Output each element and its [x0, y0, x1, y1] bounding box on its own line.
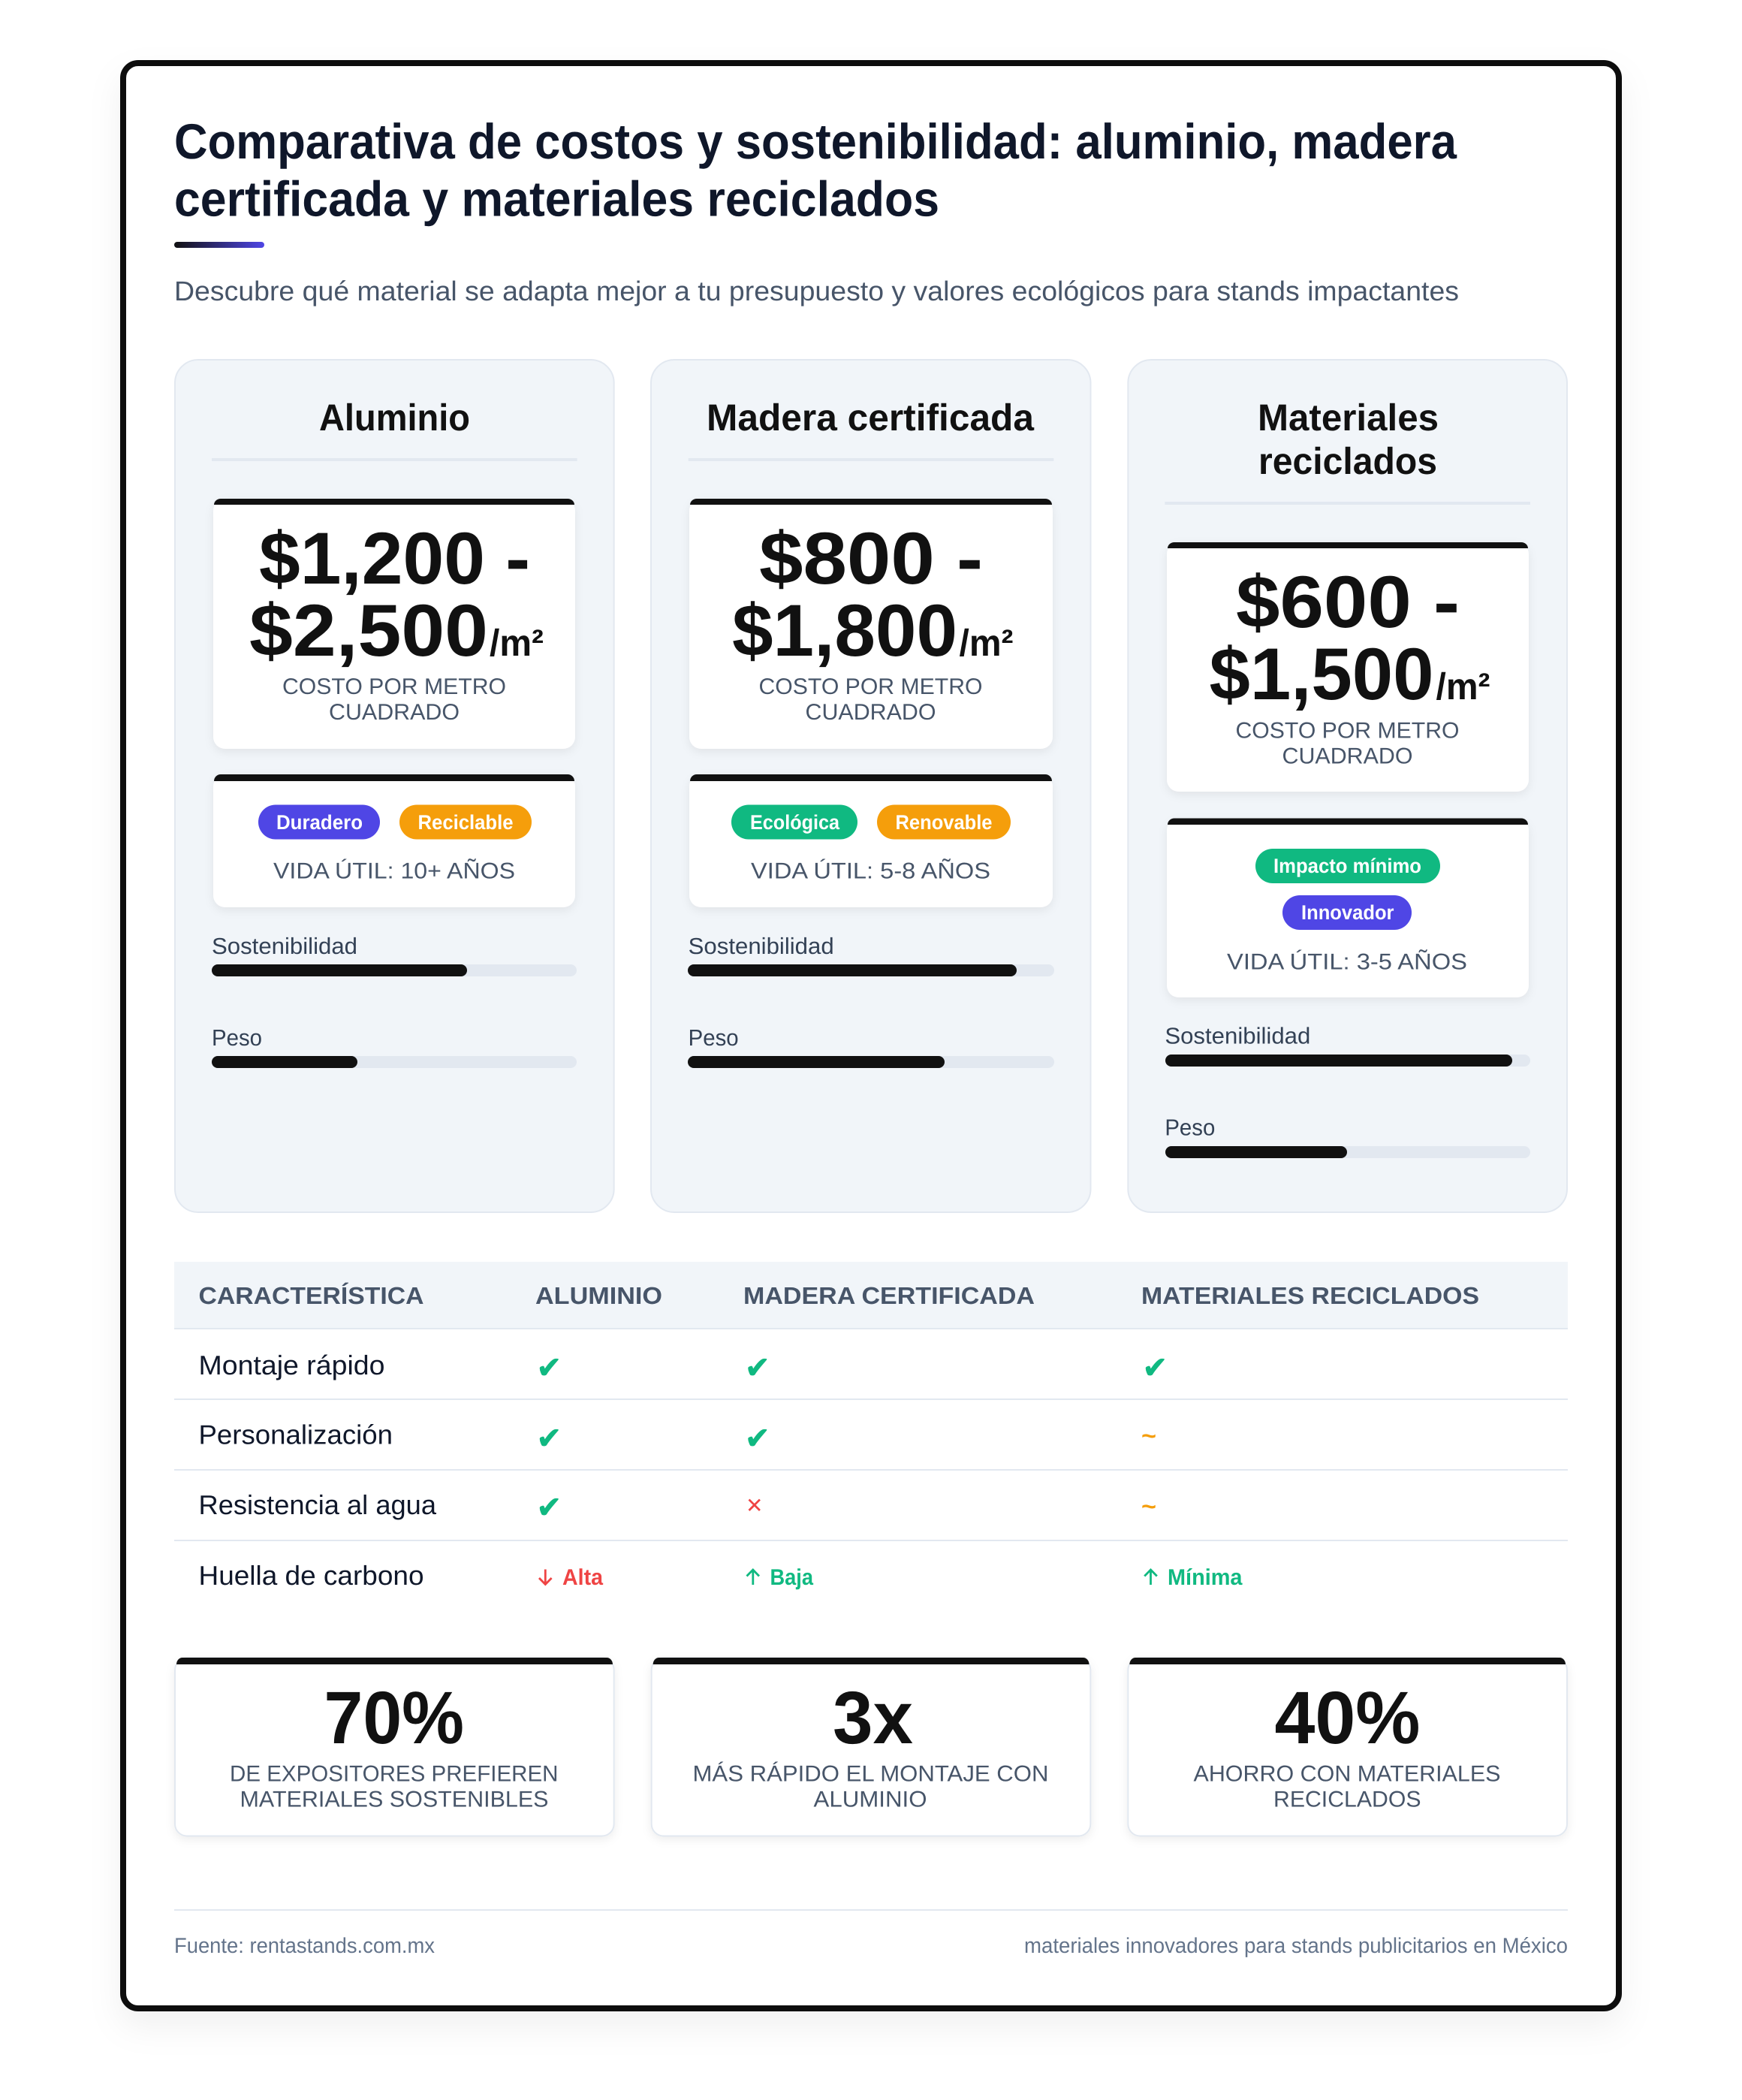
- meter: sostenibilidad aluminio: [212, 934, 577, 976]
- badge: renovable: [877, 805, 1011, 840]
- meter: sostenibilidad aluminio: Sostenibilidad: [212, 934, 357, 959]
- price card: aluminio: $2,500: [249, 589, 488, 671]
- price card: madera: $800 -: [759, 517, 983, 599]
- price card: reciclados: CUADRADO: [1282, 744, 1413, 769]
- arrow up: [746, 1570, 759, 1585]
- stat card: 3x: MÁS RÁPIDO EL MONTAJE CON: [692, 1761, 1048, 1786]
- features card: aluminio: [213, 774, 575, 907]
- price card: madera: [689, 499, 1053, 749]
- stat card: 3x: [652, 1658, 1090, 1836]
- arrow up: [1144, 1570, 1157, 1585]
- badge: innovador: Innovador: [1301, 901, 1394, 924]
- panel: materiales reciclados: [1128, 360, 1567, 1212]
- price card: reciclados: /m²: [1436, 665, 1490, 708]
- meter: sostenibilidad madera: [688, 934, 1054, 976]
- price card: madera: COSTO POR METRO: [758, 674, 982, 699]
- badge: impacto minimo: Impacto mínimo: [1273, 855, 1421, 877]
- badge: renovable: Renovable: [895, 811, 993, 834]
- footer: [174, 1909, 1568, 1958]
- price card: reciclados: COSTO POR METRO: [1236, 718, 1460, 744]
- row: montaje rapido: Montaje rápido: [198, 1350, 384, 1380]
- heading: aluminio: Aluminio: [319, 397, 470, 439]
- row: personalizacion: ✔: [745, 1421, 770, 1456]
- row: montaje rapido: [198, 1350, 1168, 1385]
- table header: MADERA CERTIFICADA: [743, 1282, 1035, 1309]
- stat card: 40%: 40%: [1275, 1676, 1421, 1759]
- meter: peso reciclados: Peso: [1165, 1115, 1215, 1140]
- table header: CARACTERÍSTICA: [198, 1282, 423, 1309]
- stat card: 40%: AHORRO CON MATERIALES: [1194, 1762, 1500, 1786]
- table header: [174, 1262, 1568, 1329]
- row: montaje rapido: ✔: [745, 1350, 770, 1385]
- badge: duradero: Duradero: [276, 811, 363, 834]
- features card: madera: VIDA ÚTIL: 5-8 AÑOS: [751, 858, 990, 883]
- badge: ecologica: [731, 805, 857, 840]
- stat card: 70%: MATERIALES SOSTENIBLES: [240, 1788, 548, 1812]
- badge: duradero: [258, 805, 380, 840]
- meter: peso madera: [688, 1025, 1054, 1068]
- stat card: 40%: [1128, 1658, 1567, 1836]
- stat card: 70%: DE EXPOSITORES PREFIEREN: [230, 1762, 559, 1786]
- price card: madera: /m²: [960, 622, 1014, 664]
- meter: peso reciclados: [1165, 1115, 1530, 1158]
- badge: innovador: [1282, 895, 1412, 930]
- meter: peso aluminio: [212, 1025, 577, 1068]
- price card: reciclados: $1,500: [1209, 632, 1434, 715]
- arrow down: [539, 1570, 552, 1585]
- row: resistencia al agua: ✕: [746, 1493, 763, 1518]
- badge: ecologica: Ecológica: [750, 811, 840, 834]
- meter: sostenibilidad reciclados: Sostenibilidad: [1165, 1023, 1310, 1048]
- stat card: 3x: ALUMINIO: [814, 1788, 927, 1812]
- row: huella de carbono: Mínima: [1168, 1565, 1243, 1590]
- row: resistencia al agua: ~: [1141, 1493, 1156, 1520]
- heading: materiales reciclados: [1258, 397, 1439, 482]
- main frame: [123, 63, 1619, 2008]
- features card: reciclados: [1167, 819, 1529, 997]
- features card: reciclados: VIDA ÚTIL: 3-5 AÑOS: [1227, 949, 1467, 975]
- heading: madera certificada: Madera certificada: [707, 397, 1035, 439]
- row: montaje rapido: ✔: [1143, 1350, 1168, 1385]
- row: montaje rapido: ✔: [536, 1350, 562, 1385]
- price card: aluminio: CUADRADO: [329, 700, 460, 725]
- source note: Fuente: rentastands.com.mx: [174, 1934, 435, 1958]
- row: huella de carbono: [198, 1560, 1243, 1591]
- price card: aluminio: /m²: [490, 622, 544, 664]
- price card: reciclados: [1167, 542, 1529, 792]
- features card: aluminio: VIDA ÚTIL: 10+ AÑOS: [273, 858, 515, 883]
- comparison table: [174, 1262, 1568, 1591]
- price card: aluminio: COSTO POR METRO: [282, 674, 506, 699]
- title underline accent: [174, 242, 264, 248]
- row: personalizacion: [198, 1420, 1156, 1456]
- price card: reciclados: $600 -: [1236, 560, 1460, 643]
- row: huella de carbono: Alta: [562, 1565, 603, 1590]
- panel: aluminio: [175, 360, 614, 1212]
- footer keyword: materiales innovadores para stands publicitarios en México: [1024, 1934, 1568, 1958]
- table header: ALUMINIO: [535, 1282, 662, 1309]
- badge: reciclable: [399, 805, 532, 840]
- features card: madera: [689, 774, 1053, 907]
- price card: madera: $1,800: [732, 589, 957, 671]
- meter: sostenibilidad madera: Sostenibilidad: [689, 934, 834, 959]
- price card: aluminio: [213, 499, 575, 749]
- meter: sostenibilidad reciclados: [1165, 1023, 1530, 1067]
- badge: impacto minimo: [1255, 849, 1440, 883]
- price card: aluminio: $1,200 -: [259, 517, 530, 599]
- row: personalizacion: ✔: [536, 1421, 562, 1456]
- price card: madera: CUADRADO: [805, 700, 936, 725]
- stat card: 40%: RECICLADOS: [1273, 1788, 1421, 1812]
- meter: peso madera: Peso: [689, 1025, 739, 1051]
- row: huella de carbono: Baja: [770, 1565, 813, 1590]
- panel: madera certificada: [651, 360, 1090, 1212]
- title: certificada y materiales reciclados: [174, 171, 939, 227]
- stat card: 3x: 3x: [833, 1676, 913, 1759]
- row: resistencia al agua: [198, 1489, 1156, 1525]
- table header: MATERIALES RECICLADOS: [1141, 1282, 1479, 1309]
- title: Comparativa de costos y sostenibilidad: aluminio, madera: [174, 113, 1457, 169]
- meter: peso aluminio: Peso: [212, 1025, 262, 1051]
- title: [174, 113, 1457, 227]
- row: resistencia al agua: ✔: [536, 1490, 562, 1525]
- stat card: 70%: [175, 1658, 614, 1836]
- row: personalizacion: ~: [1141, 1423, 1156, 1450]
- badge: reciclable: Reciclable: [417, 811, 514, 834]
- row: personalizacion: Personalización: [198, 1420, 393, 1450]
- heading: materiales reciclados: reciclados: [1258, 440, 1437, 482]
- heading: materiales reciclados: Materiales: [1258, 397, 1439, 439]
- stat card: 70%: 70%: [324, 1676, 464, 1759]
- subtitle: Descubre qué material se adapta mejor a tu presupuesto y valores ecológicos para stands impactantes: [174, 276, 1459, 306]
- row: huella de carbono: Huella de carbono: [198, 1560, 423, 1591]
- row: resistencia al agua: Resistencia al agua: [198, 1489, 437, 1520]
